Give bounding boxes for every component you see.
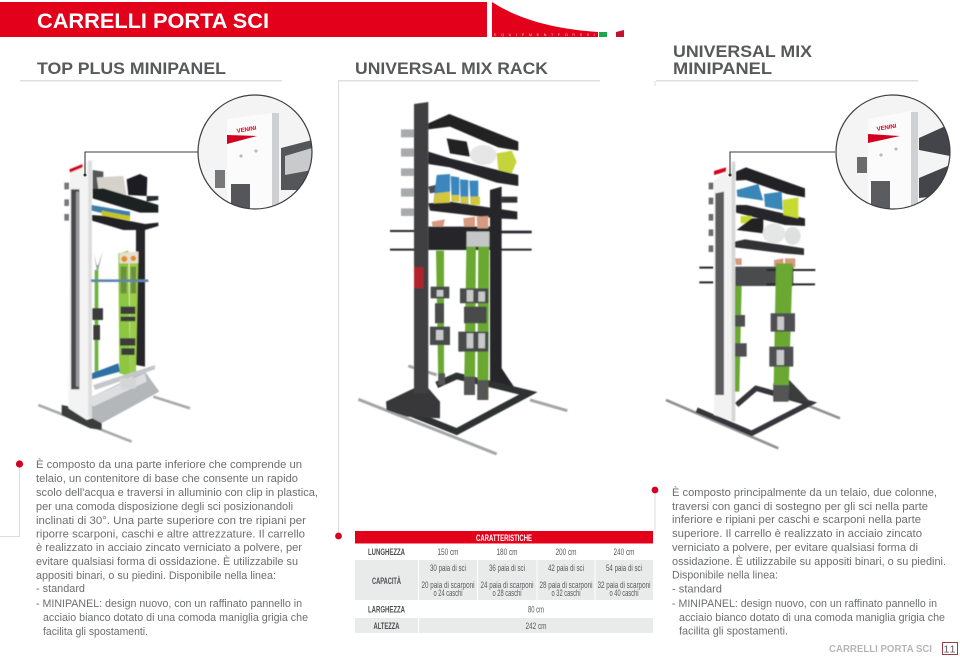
text block: universal mix minipanel description [672, 486, 946, 638]
text block: top plus minipanel description: per una comoda disposizione degli sci posizionandoli [36, 501, 293, 513]
text block: top plus minipanel description: - MINIPANEL: design nuovo, con un raffinato pannello in [36, 598, 302, 610]
table row: capacita: CAPACITÀ [372, 575, 401, 586]
panel hooks [64, 183, 69, 221]
skis [735, 286, 742, 392]
text block: top plus minipanel description: evitare qualsiasi forma di ossidazione. È utilizzabile su [36, 555, 298, 568]
table row: lunghezza: 240 cm [614, 546, 635, 557]
rails [38, 397, 190, 442]
table row: lunghezza: 180 cm [496, 546, 518, 557]
footer: section name and page number: CARRELLI PORTA SCI [829, 644, 932, 655]
text block: universal mix minipanel description: verniciato a polvere, per evitare qualsiasi forma di [672, 542, 918, 554]
rails [358, 366, 567, 454]
text block: top plus minipanel description: telaio, un contenitore di base che consente un rapido [36, 473, 298, 485]
ski rack [428, 227, 490, 250]
table row: lunghezza: LUNGHEZZA [368, 546, 405, 557]
table row: larghezza: LARGHEZZA [368, 604, 405, 614]
brand logo: equipment for ski: E Q U I P M E N T F O R S K I [494, 33, 595, 37]
table row: capacita: 28 paia di scarponi [540, 579, 592, 590]
heading: universal mix rack: UNIVERSAL MIX RACK [355, 59, 548, 78]
detail lens: universal mix minipanel [728, 95, 950, 210]
table header [355, 531, 653, 544]
ski bars [91, 279, 148, 282]
upper shelves [93, 170, 103, 190]
footer: section name and page number: 11 [944, 644, 956, 656]
text block: top plus minipanel description: appositi binari, o su piedini. Disponibile nella linea: [36, 570, 276, 582]
back upright [490, 187, 515, 388]
table row: capacita: 36 paia di sci [489, 562, 525, 573]
heading: universal mix minipanel: MINIPANEL [673, 59, 772, 78]
base tray [88, 372, 159, 423]
table row: capacita: o 32 caschi [552, 587, 580, 598]
text block: universal mix minipanel description: acciaio bianco dotato di una comoda maniglia grigia che [679, 612, 945, 624]
heading: universal mix minipanel: UNIVERSAL MIX [673, 42, 812, 61]
text block: universal mix minipanel description: inferiore e ripiani per caschi e scarponi nella parte [672, 514, 921, 526]
table row: capacita [355, 560, 653, 600]
ghost arms [401, 129, 414, 216]
text block: top plus minipanel description: inclinati di 30°. Una parte superiore con tre ripiani per [36, 515, 306, 527]
text block: top plus minipanel description: facilita gli spostamenti. [43, 626, 148, 638]
text block: top plus minipanel description [36, 458, 318, 638]
table row: capacita: o 28 caschi [492, 587, 522, 598]
white column [68, 161, 92, 420]
text block: top plus minipanel description: acciaio bianco dotato di una comoda maniglia grigia che [43, 612, 308, 624]
heading: universal mix minipanel [656, 42, 918, 82]
text block: universal mix minipanel description: È composto principalmente da un telaio, due colonne, [672, 486, 937, 499]
text block: top plus minipanel description: È composto da una parte inferiore che comprende un [36, 458, 302, 471]
skis [436, 251, 444, 385]
white column [714, 167, 735, 422]
skis [94, 251, 103, 270]
table row: altezza [355, 618, 653, 633]
text block: universal mix minipanel description: facilita gli spostamenti. [679, 626, 788, 638]
brand logo: equipment for ski [492, 2, 624, 37]
table row: capacita: 32 paia di scarponi [598, 579, 650, 590]
table row: capacita: o 40 caschi [610, 587, 638, 598]
connector line and bullet: left text [0, 460, 23, 536]
helmets and boots [737, 184, 763, 201]
table row: altezza: 242 cm [526, 620, 547, 631]
text block: universal mix minipanel description: superiore. Il carrello è realizzato in acciaio zincato [672, 528, 922, 540]
table: caratteristiche [355, 531, 653, 633]
table row: larghezza: 80 cm [528, 604, 544, 614]
table row: capacita: 30 paia di sci [430, 562, 466, 573]
table row: larghezza [368, 604, 544, 614]
rails [666, 400, 840, 448]
detail lens: top plus panel [84, 95, 312, 210]
front upright [414, 102, 428, 393]
text block: universal mix minipanel description: - standard [672, 584, 722, 596]
back upright [136, 227, 145, 367]
base frame [390, 376, 528, 432]
table row: capacita: 24 paia di scarponi [480, 579, 534, 590]
heading: top plus minipanel: TOP PLUS MINIPANEL [37, 59, 226, 78]
shelves [736, 167, 805, 197]
table row: lunghezza [368, 546, 635, 557]
table row: capacita: 54 paia di sci [606, 562, 642, 573]
connector line and bullet: centre table [335, 81, 342, 539]
product photo: universal mix rack [358, 102, 567, 454]
text block: top plus minipanel description: riporre scarponi, caschi e altre attrezzature. Il carrello [36, 528, 305, 540]
ski rack [735, 267, 793, 286]
text block: universal mix minipanel description: traversi con ganci di sostegno per gli sci nella parte [672, 501, 928, 513]
table header: CARATTERISTICHE [476, 532, 532, 543]
product photo: top plus minipanel rack [38, 161, 190, 442]
header band with title: CARRELLI PORTA SCI [37, 9, 269, 33]
header band with title [0, 2, 487, 37]
text block: universal mix minipanel description: Disponibile nella linea: [672, 570, 778, 582]
table row: lunghezza: 150 cm [438, 546, 459, 557]
table row: altezza: ALTEZZA [374, 620, 400, 631]
table row: lunghezza: 200 cm [556, 546, 577, 557]
text block: top plus minipanel description: è realizzato in acciaio zincato verniciato a polvere, per [36, 542, 302, 554]
detail lens: top plus panel: VENINI [236, 126, 257, 135]
helmets and boots [447, 138, 470, 157]
connector line and bullet: right text [652, 81, 658, 530]
product photo: universal mix minipanel rack [666, 162, 840, 448]
text block: top plus minipanel description: scolo dell'acqua e traversi in alluminio con clip in plastica, [36, 487, 318, 499]
table row: capacita: 42 paia di sci [548, 562, 584, 573]
text block: top plus minipanel description: - standard [36, 583, 85, 595]
shelves [428, 114, 518, 151]
detail lens: universal mix minipanel: VENINI [876, 124, 897, 133]
table row: capacita: 20 paia di scarponi [422, 579, 474, 590]
text block: universal mix minipanel description: - MINIPANEL: design nuovo, con un raffinato pannello in [672, 598, 937, 610]
text block: universal mix minipanel description: ossidazione. È utilizzabile su appositi binari, o su piedini. [672, 555, 946, 568]
base frame [697, 388, 810, 433]
table row: capacita: o 24 caschi [434, 587, 462, 598]
